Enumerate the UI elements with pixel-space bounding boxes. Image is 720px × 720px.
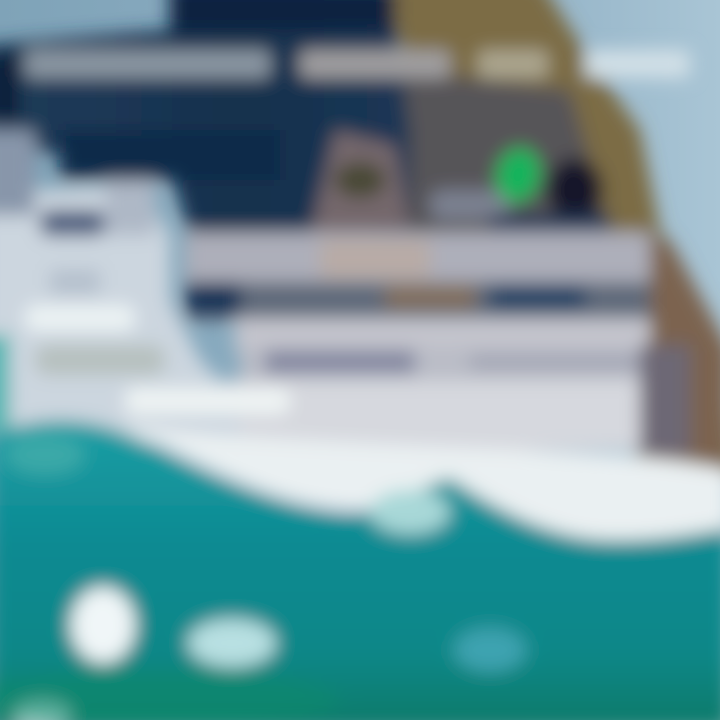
- ship: white decks: [185, 232, 690, 455]
- icon: green marker: [490, 142, 546, 208]
- sea: water bubbles: [12, 587, 526, 720]
- title: unreadable blurred headline: [25, 50, 690, 78]
- ship: dark navy upper hull: [0, 0, 410, 235]
- sea: turquoise water: [0, 421, 720, 720]
- bubble: large: [71, 587, 135, 663]
- sea: foam patch: [370, 490, 450, 534]
- bubble: wide: [188, 619, 276, 667]
- bubble: faint: [454, 628, 526, 672]
- sea: green shadow at bottom: [0, 670, 340, 720]
- bubble: bottom: [12, 700, 72, 720]
- sea: surf foam: [120, 425, 720, 545]
- ship: superstructure: [310, 130, 610, 235]
- sea: pale wave highlight: [5, 435, 85, 475]
- ship: bow details: [0, 210, 290, 430]
- headland: golden brown slope: [385, 0, 720, 480]
- ship: white bow and spray: [0, 130, 240, 450]
